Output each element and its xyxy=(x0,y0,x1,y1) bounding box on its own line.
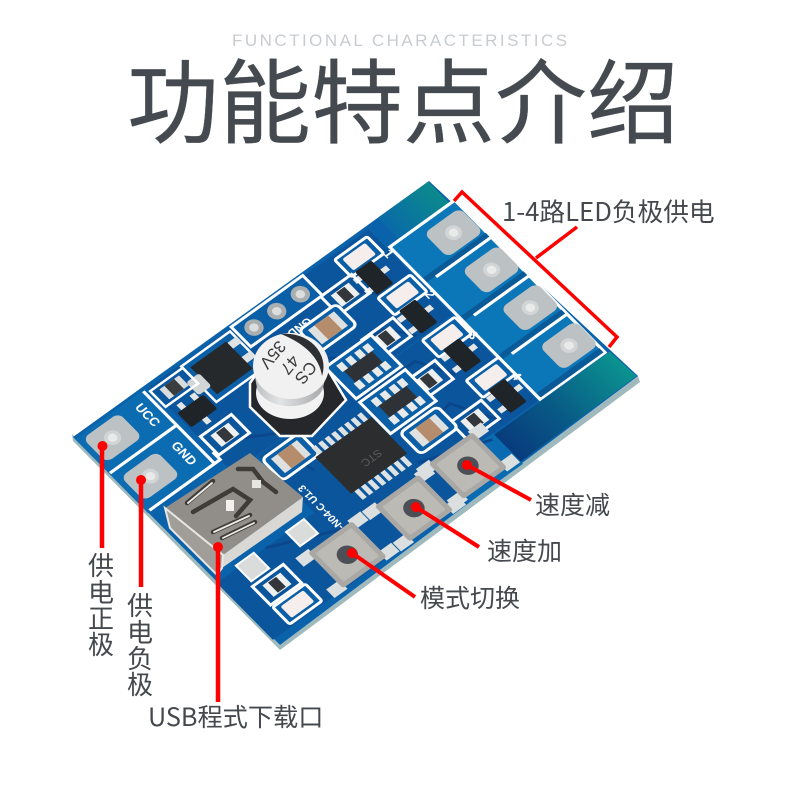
resistor array 2 xyxy=(360,370,436,434)
can top xyxy=(253,333,329,399)
USB top notch hole xyxy=(252,480,261,488)
trace lines xyxy=(143,271,509,580)
ceramic capacitor A xyxy=(299,304,357,352)
ceramic capacitor B xyxy=(400,406,458,455)
circuit board xyxy=(72,175,640,650)
resistor array 1 xyxy=(325,335,402,399)
header pads xyxy=(231,275,322,347)
channel numbers: 3 xyxy=(465,328,482,342)
main IC xyxy=(308,410,416,502)
transistor 2 xyxy=(393,295,443,338)
blue strip by buttons xyxy=(440,433,523,502)
ceramic capacitor C xyxy=(262,433,320,481)
transistor 3 xyxy=(437,334,487,377)
silk: GND: GND xyxy=(168,439,200,468)
darker copper zones xyxy=(76,229,566,640)
transistor 1 xyxy=(349,256,399,299)
power pad panel xyxy=(75,390,216,513)
solder pad left xyxy=(236,553,269,581)
callout: mode button xyxy=(347,548,415,597)
dark right corner strip xyxy=(490,350,638,465)
subtitle: FUNCTIONAL CHARACTERISTICS xyxy=(232,31,570,50)
can dark stripe xyxy=(281,334,324,376)
can body xyxy=(253,362,329,406)
can lower band xyxy=(256,367,324,419)
resistor 4 xyxy=(450,400,499,441)
transistor 4 xyxy=(482,375,533,417)
power LED xyxy=(273,584,322,624)
small transistor xyxy=(172,389,222,432)
silk: UCC: UCC xyxy=(132,400,164,430)
resistor 2 xyxy=(362,318,411,358)
label: power negative: 负 xyxy=(127,639,153,676)
channel numbers: 1 xyxy=(380,247,397,261)
indicator LED 2 xyxy=(378,275,427,315)
board surface xyxy=(73,181,638,645)
resistor 3 xyxy=(404,360,453,401)
label: LED negative supply: 1-4路LED负极供电 xyxy=(502,192,715,229)
USB bright lip xyxy=(222,497,303,568)
can marking: 35V xyxy=(255,337,290,373)
can marking xyxy=(255,337,320,388)
diode xyxy=(150,368,198,407)
button: speed down xyxy=(416,422,520,509)
callout: USB xyxy=(213,542,223,702)
capacitor base xyxy=(250,355,346,436)
label: power positive: 供 xyxy=(88,546,114,583)
white separators power xyxy=(77,387,220,512)
indicator LED 1 xyxy=(335,236,384,277)
button: speed up xyxy=(362,465,466,551)
teal corner strip xyxy=(378,182,450,240)
callout: power positive xyxy=(98,441,108,548)
pad: LED 3 xyxy=(500,283,560,333)
USB top details xyxy=(187,469,276,538)
pad: LED 2 xyxy=(462,245,521,295)
silk: GND D: GND D xyxy=(274,315,316,347)
red bracket: LED outputs xyxy=(454,192,617,347)
channel numbers: 4 xyxy=(508,369,526,384)
pad: LED 1 xyxy=(424,208,483,258)
label: power negative: 供 xyxy=(127,586,153,623)
board edge xyxy=(72,376,640,650)
USB top shell xyxy=(165,453,303,555)
title: 功能特点介绍 xyxy=(127,30,679,163)
resistor 5 xyxy=(200,414,250,455)
can marking: 47 xyxy=(276,351,303,378)
board details xyxy=(73,175,640,642)
resistor 1 xyxy=(321,274,370,315)
callout: power negative xyxy=(136,475,146,587)
USB connector xyxy=(165,453,303,575)
callout: speed up button xyxy=(411,502,479,547)
pad: VCC xyxy=(83,413,142,463)
electrolytic capacitor xyxy=(250,333,346,436)
label: USB download port: USB程式下载口 xyxy=(148,698,323,734)
callout: speed down button xyxy=(462,460,531,500)
label: power negative: 电 xyxy=(127,613,153,650)
can marking: CS xyxy=(291,358,320,388)
label: mode switch: 模式切换 xyxy=(420,579,520,615)
channel numbers xyxy=(380,244,526,386)
USB center contact xyxy=(226,500,234,511)
channel numbers: 2 xyxy=(422,287,439,301)
main IC: STC xyxy=(358,447,384,468)
button: mode xyxy=(295,511,400,598)
regulator xyxy=(175,331,266,407)
indicator LED 4 xyxy=(466,357,515,398)
USB opening xyxy=(165,508,223,575)
pad: GND xyxy=(121,451,180,501)
indicator LED 3 xyxy=(422,317,472,357)
LED output panel xyxy=(390,200,605,399)
label: power positive: 电 xyxy=(88,573,114,610)
resistor 6 xyxy=(252,564,302,605)
label: speed up: 速度加 xyxy=(487,532,562,568)
label: power positive: 正 xyxy=(88,599,114,636)
silk: board version: HR-N04-C U1.3 xyxy=(296,483,357,542)
label: speed down: 速度减 xyxy=(535,486,610,522)
pad: LED 4 xyxy=(539,321,599,370)
label: power negative: 极 xyxy=(127,665,153,702)
label: power positive: 极 xyxy=(88,625,114,662)
solder pad right xyxy=(286,519,318,546)
